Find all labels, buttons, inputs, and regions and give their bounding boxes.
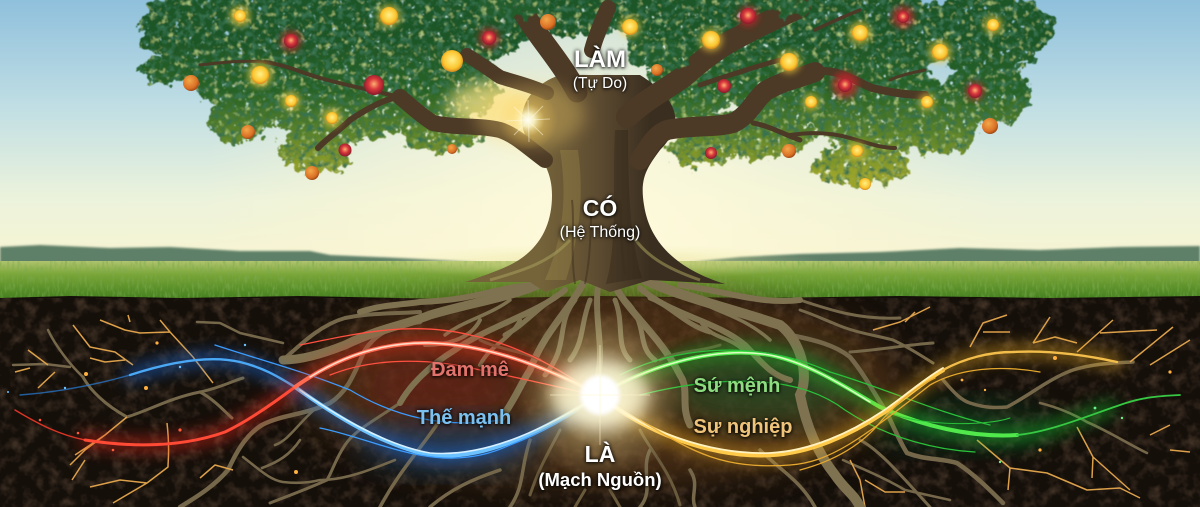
energy stream: red (Đam mê) — [15, 329, 600, 445]
tree trunk — [465, 75, 725, 292]
label: Thế mạnh: Thế mạnh — [417, 407, 511, 429]
label: Đam mê: Đam mê — [431, 359, 509, 381]
lower roots below the core — [480, 340, 720, 507]
tree branches — [200, 7, 925, 160]
label: Sự nghiệp: Sự nghiệp — [694, 416, 792, 438]
sun flare through branches — [475, 83, 585, 150]
grass field — [0, 244, 1200, 299]
distant tree line — [0, 245, 1200, 264]
olive underground roots — [13, 300, 1147, 507]
glowing gold root tips — [15, 307, 1190, 507]
top foliage over branch ends — [474, 0, 814, 71]
label: LÀM (Tự Do) — [573, 45, 627, 92]
soil warm glow — [300, 285, 1050, 485]
label: LÀ (Mạch Nguồn): LÀ — [585, 440, 615, 467]
energy stream: green (Sứ mệnh) — [600, 350, 1180, 452]
fruits — [183, 7, 999, 190]
label: LÀM (Tự Do): (Tự Do) — [573, 75, 627, 92]
label: CÓ (Hệ Thống) — [560, 194, 640, 241]
underground soil — [0, 296, 1200, 507]
fruit glow halos — [230, 5, 1002, 159]
label: LÀ (Mạch Nguồn) — [538, 440, 662, 490]
label: Sứ mệnh: Sứ mệnh — [694, 375, 780, 397]
energy stream: blue (Thế mạnh) — [20, 345, 600, 458]
root mass at trunk base — [283, 272, 860, 507]
sky background — [0, 0, 1200, 265]
label: LÀ (Mạch Nguồn): (Mạch Nguồn) — [538, 469, 662, 490]
label: CÓ (Hệ Thống): CÓ — [583, 194, 617, 221]
central light source — [515, 310, 685, 480]
label: CÓ (Hệ Thống): (Hệ Thống) — [560, 224, 640, 241]
label: LÀM (Tự Do): LÀM — [574, 45, 626, 73]
canopy foliage — [137, 0, 1056, 185]
light behind foliage near the sun — [448, 81, 532, 129]
sparkles along streams — [7, 341, 1172, 474]
energy stream: gold (Sự nghiệp) — [600, 352, 1117, 470]
